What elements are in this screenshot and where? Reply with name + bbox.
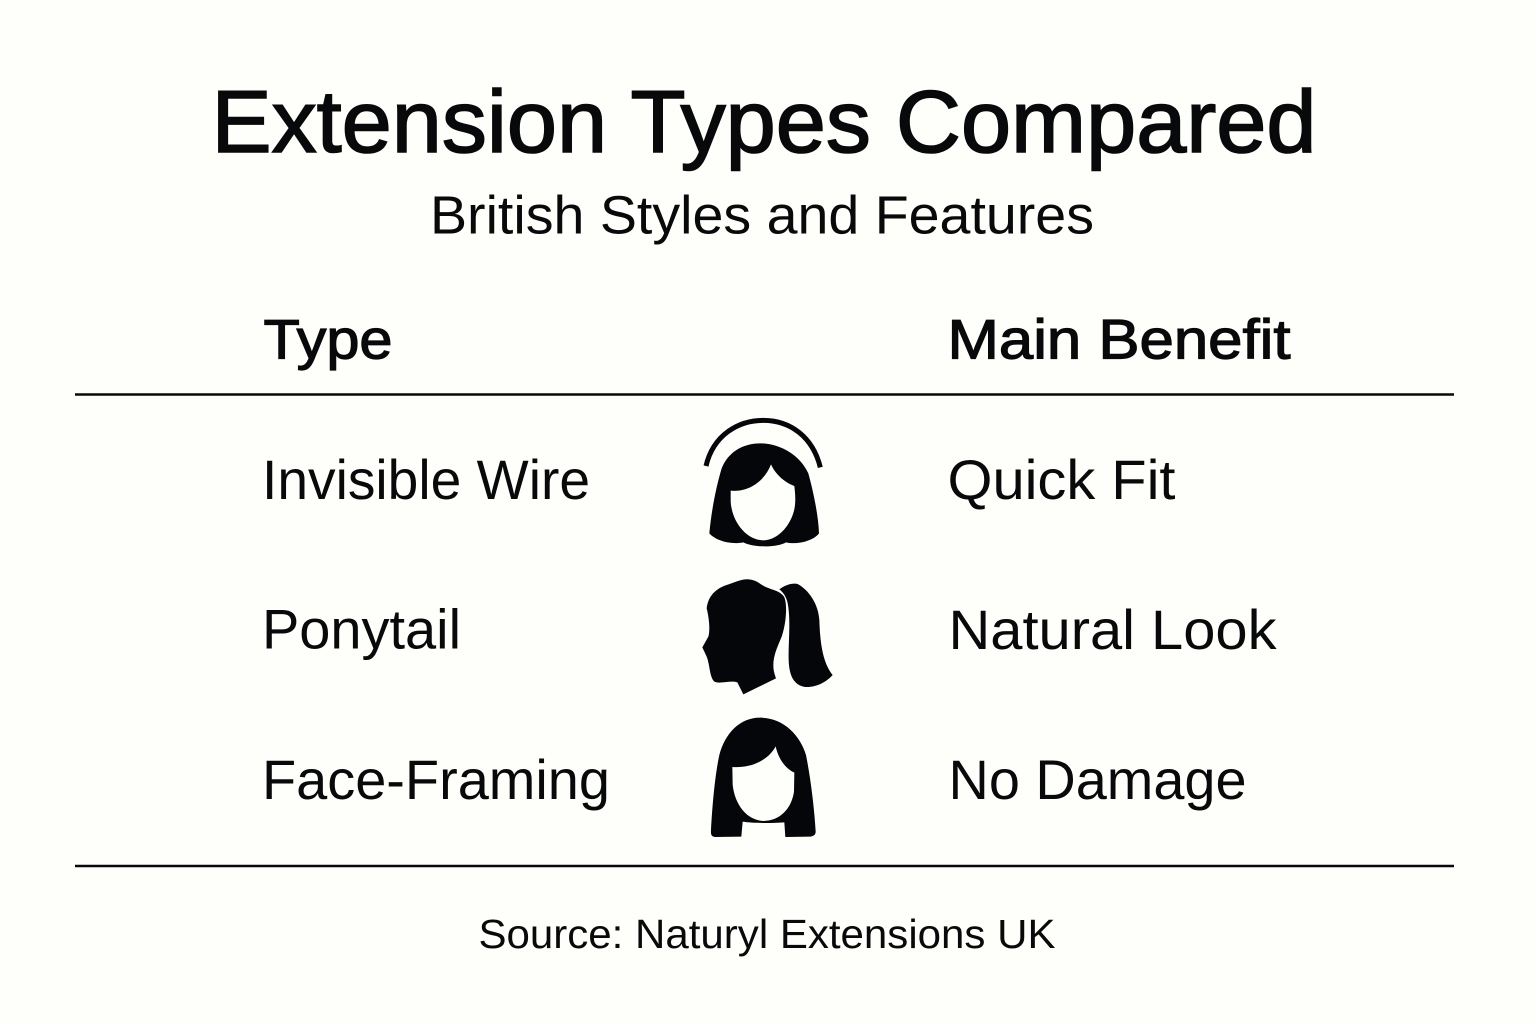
icon: ponytail silhouette <box>702 579 833 694</box>
row 1 type: invisible wire: Invisible Wire <box>262 448 590 511</box>
title: Extension Types Compared <box>212 72 1316 171</box>
row 3 benefit: no damage: No Damage <box>948 748 1246 811</box>
icon: invisible wire hair <box>706 420 820 546</box>
column heading: type: Type <box>264 308 392 370</box>
column heading: main benefit: Main Benefit <box>948 308 1291 370</box>
icon: face-framing hair <box>711 718 816 837</box>
row 2 type: ponytail: Ponytail <box>262 598 461 660</box>
row 3 type: face-framing: Face-Framing <box>262 748 610 811</box>
source note: Source: Naturyl Extensions UK <box>478 911 1056 957</box>
row 1 benefit: quick fit: Quick Fit <box>948 448 1176 511</box>
subtitle: British Styles and Features <box>430 186 1094 246</box>
row 2 benefit: natural look: Natural Look <box>948 598 1278 661</box>
